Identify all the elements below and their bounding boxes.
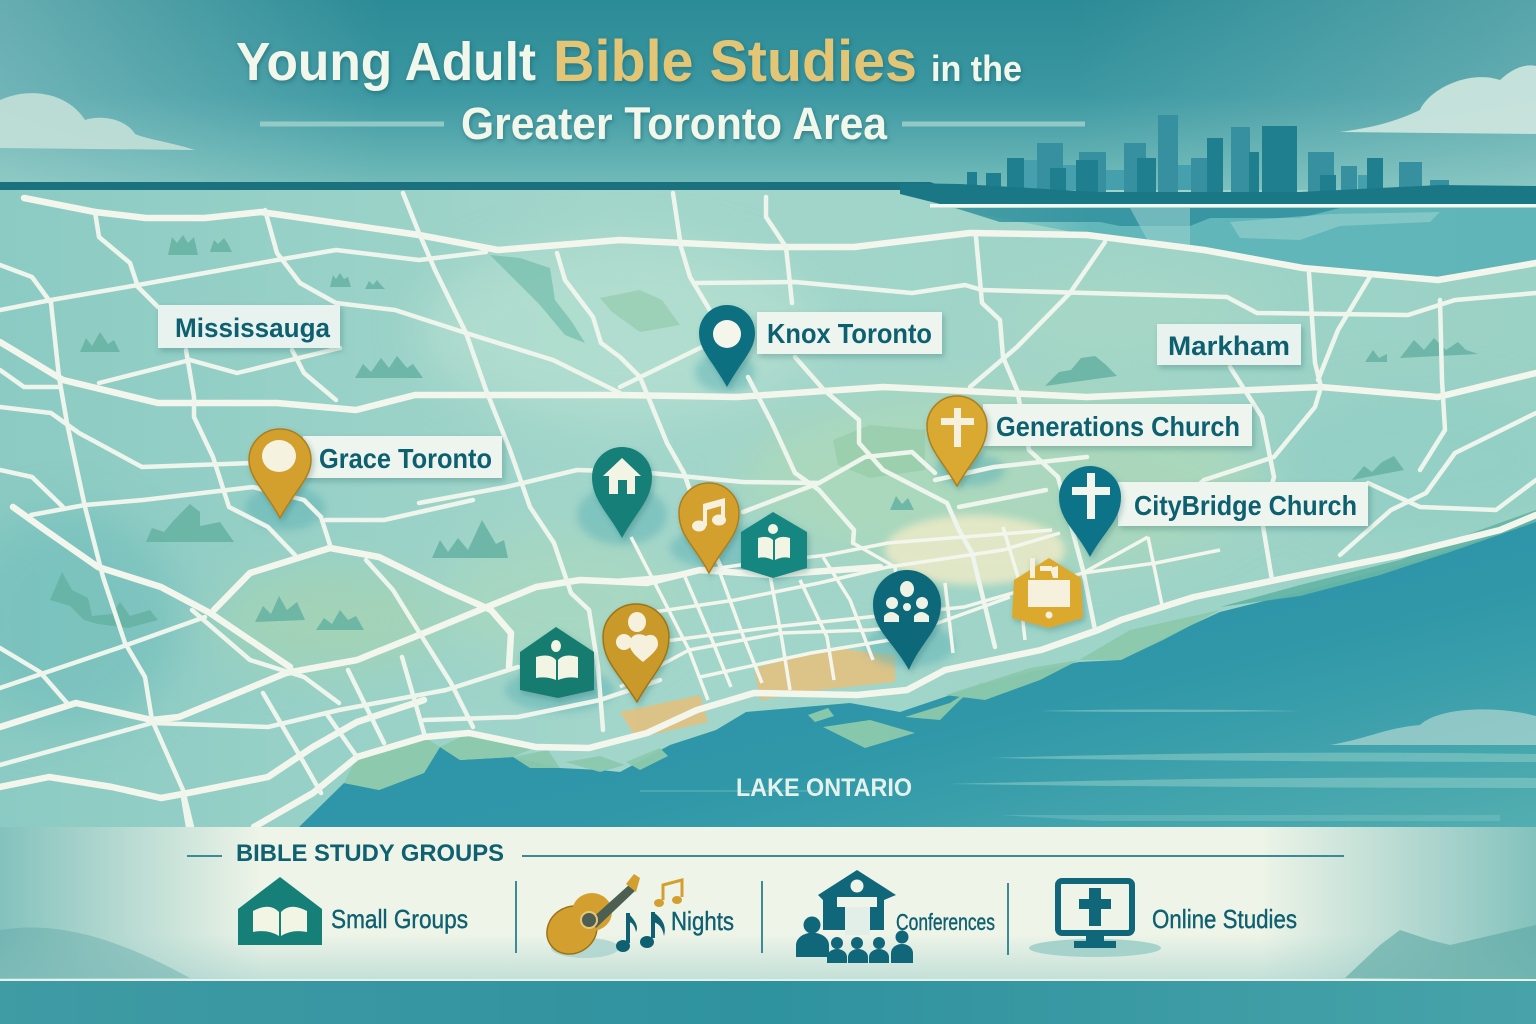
title rule right bbox=[902, 122, 1085, 126]
title bbox=[236, 29, 1022, 149]
label: Mississauga: Mississauga bbox=[175, 313, 331, 343]
pin: community group bbox=[873, 570, 941, 670]
skyline reflection bbox=[955, 208, 1440, 245]
title: in the bbox=[931, 48, 1022, 89]
legend icon: conferences bbox=[796, 870, 913, 963]
label: Grace Toronto bbox=[303, 436, 502, 478]
divider bbox=[1007, 883, 1009, 955]
label: Knox Toronto: Knox Toronto bbox=[767, 318, 932, 349]
downtown highlight bbox=[620, 648, 895, 738]
skyline bbox=[900, 115, 1536, 208]
label: Generations Church bbox=[983, 404, 1252, 446]
shoreline islands and shallows bbox=[344, 510, 1536, 790]
map land bbox=[0, 190, 1536, 827]
title rule left bbox=[260, 122, 444, 126]
divider bbox=[515, 881, 517, 953]
lake ripples bbox=[640, 710, 1536, 821]
legend foliage left bbox=[0, 927, 190, 978]
pin: house bbox=[592, 447, 652, 538]
bottom strip bbox=[0, 979, 1536, 1024]
green park areas bbox=[490, 255, 925, 478]
pin: Knox Toronto bbox=[699, 305, 755, 387]
lake bbox=[299, 518, 1536, 827]
left cloud bbox=[0, 93, 195, 150]
label: CityBridge Church: CityBridge Church bbox=[1134, 490, 1357, 521]
tree clusters bbox=[50, 235, 1478, 630]
pin: heart and person bbox=[603, 604, 669, 702]
legend foliage right bbox=[1345, 925, 1536, 980]
legend panel bbox=[0, 827, 1536, 980]
legend icon: online studies bbox=[1029, 881, 1161, 957]
soft green and teal land washes bbox=[0, 240, 1536, 730]
secondary roads bbox=[0, 193, 1536, 827]
label: CityBridge Church bbox=[1118, 482, 1368, 526]
lake cloud bbox=[1330, 709, 1536, 745]
label: Markham: Markham bbox=[1168, 331, 1290, 361]
north water bbox=[940, 206, 1536, 280]
label: Lake Ontario: LAKE ONTARIO bbox=[736, 774, 912, 802]
legend text: small groups: Small Groups bbox=[331, 904, 468, 934]
legend text: conferences: Conferences bbox=[896, 909, 995, 935]
pin: Generations Church bbox=[927, 396, 987, 486]
label: Markham bbox=[1157, 324, 1301, 365]
marker: open book teal large bbox=[520, 627, 594, 698]
major road network bbox=[0, 198, 1536, 827]
legend icon: guitar and notes bbox=[538, 874, 682, 964]
label: Generations Church: Generations Church bbox=[996, 411, 1240, 442]
label: Knox Toronto bbox=[757, 312, 942, 354]
legend text: nights: Nights bbox=[671, 906, 734, 936]
downtown glow bbox=[885, 515, 1065, 585]
background: sky band bbox=[0, 0, 1536, 190]
pin shadows bbox=[245, 352, 1005, 712]
title: Young Adult bbox=[236, 32, 536, 92]
legend icon: small groups bbox=[238, 877, 322, 945]
pin: music bbox=[679, 483, 739, 573]
divider bbox=[761, 881, 763, 953]
marker: open book teal small bbox=[741, 512, 807, 578]
legend heading: BIBLE STUDY GROUPS bbox=[236, 840, 504, 867]
right cloud bbox=[1340, 65, 1536, 134]
downtown street grid bbox=[620, 527, 1220, 700]
title: Greater Toronto Area bbox=[461, 98, 888, 149]
marker: gold tablet bbox=[1012, 558, 1083, 628]
label: Mississauga bbox=[158, 305, 340, 348]
legend text: online studies: Online Studies bbox=[1152, 904, 1297, 934]
pin: CityBridge Church bbox=[1059, 466, 1121, 557]
title: Bible Studies bbox=[553, 29, 917, 94]
pin: Grace Toronto bbox=[249, 429, 311, 518]
label: Grace Toronto: Grace Toronto bbox=[319, 443, 492, 474]
horizon shoreline bbox=[0, 182, 960, 192]
